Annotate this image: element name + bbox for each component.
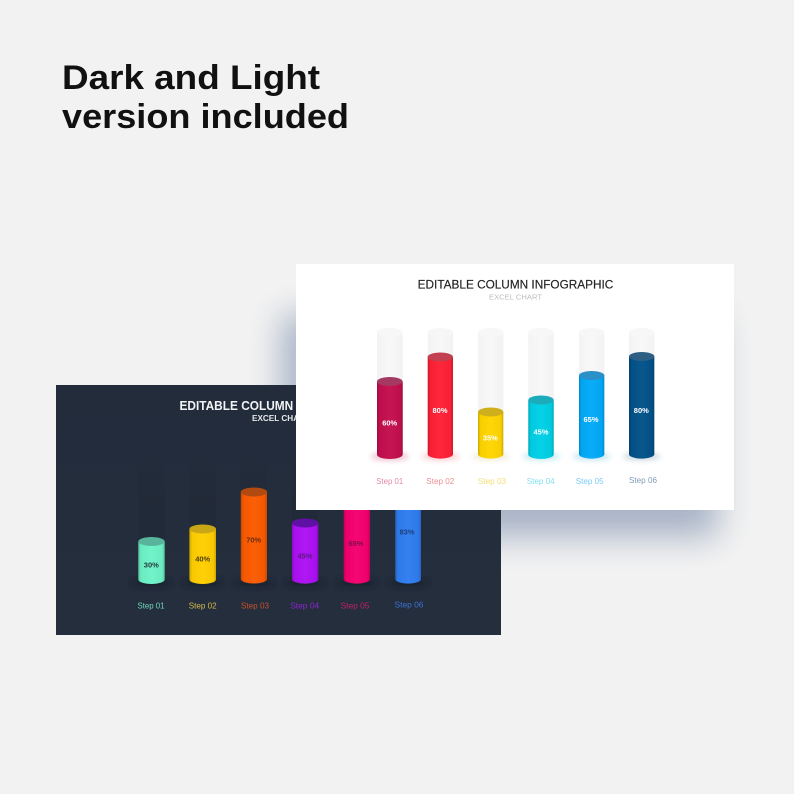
- dark column 2: Step 02: [189, 600, 217, 610]
- light column 5: Step 05: [576, 476, 604, 486]
- light column 6: [623, 328, 661, 485]
- dark panel subheading: EXCEL CHART: [252, 414, 310, 423]
- light column 6: Step 06: [629, 475, 657, 485]
- light column 3: 35%: [483, 434, 498, 442]
- light column 2: 80%: [432, 406, 448, 415]
- dark column 3: 70%: [246, 536, 262, 544]
- dark column 2: 40%: [195, 554, 211, 564]
- light column 1: Step 01: [376, 476, 403, 486]
- light panel shadow: [282, 315, 718, 537]
- dark column 3: Step 03: [241, 600, 269, 610]
- dark column 5: [337, 495, 377, 610]
- dark column 6: [388, 495, 428, 610]
- light column 4: [522, 328, 560, 486]
- dark column 5: 65%: [348, 539, 364, 548]
- light panel heading: EDITABLE COLUMN INFOGRAPHIC: [418, 280, 613, 292]
- dark column 1: [132, 450, 172, 610]
- light column 6: 80%: [634, 406, 649, 415]
- title: version included: [62, 98, 349, 136]
- light column 4: Step 04: [527, 476, 555, 486]
- dark column 1: Step 01: [138, 600, 165, 610]
- light column 1: 60%: [382, 418, 398, 428]
- dark column 5: Step 05: [340, 600, 370, 610]
- light column 1: [371, 328, 409, 486]
- dark column 6: Step 06: [394, 600, 424, 610]
- dark column 4: Step 04: [290, 600, 319, 610]
- dark column 4: [285, 450, 325, 610]
- dark column 2: [183, 450, 223, 610]
- light column 3: [472, 328, 510, 486]
- title: [62, 59, 349, 136]
- light column 5: 65%: [583, 415, 599, 424]
- light column 2: Step 02: [426, 476, 455, 486]
- light column 3: Step 03: [478, 476, 506, 486]
- light column 5: [573, 328, 611, 486]
- dark column 4: 45%: [297, 552, 313, 560]
- panel: dark version: [56, 385, 501, 635]
- light panel subheading: EXCEL CHART: [489, 292, 542, 302]
- dark column 3: [234, 451, 274, 610]
- title: Dark and Light: [62, 59, 320, 97]
- light column 4: 45%: [533, 428, 549, 436]
- dark column 6: 83%: [399, 528, 415, 536]
- light column 2: [421, 328, 459, 486]
- dark column 1: 30%: [144, 560, 159, 570]
- panel: light version: [296, 264, 734, 510]
- dark panel heading: EDITABLE COLUMN INFOGRAPHIC: [180, 399, 380, 413]
